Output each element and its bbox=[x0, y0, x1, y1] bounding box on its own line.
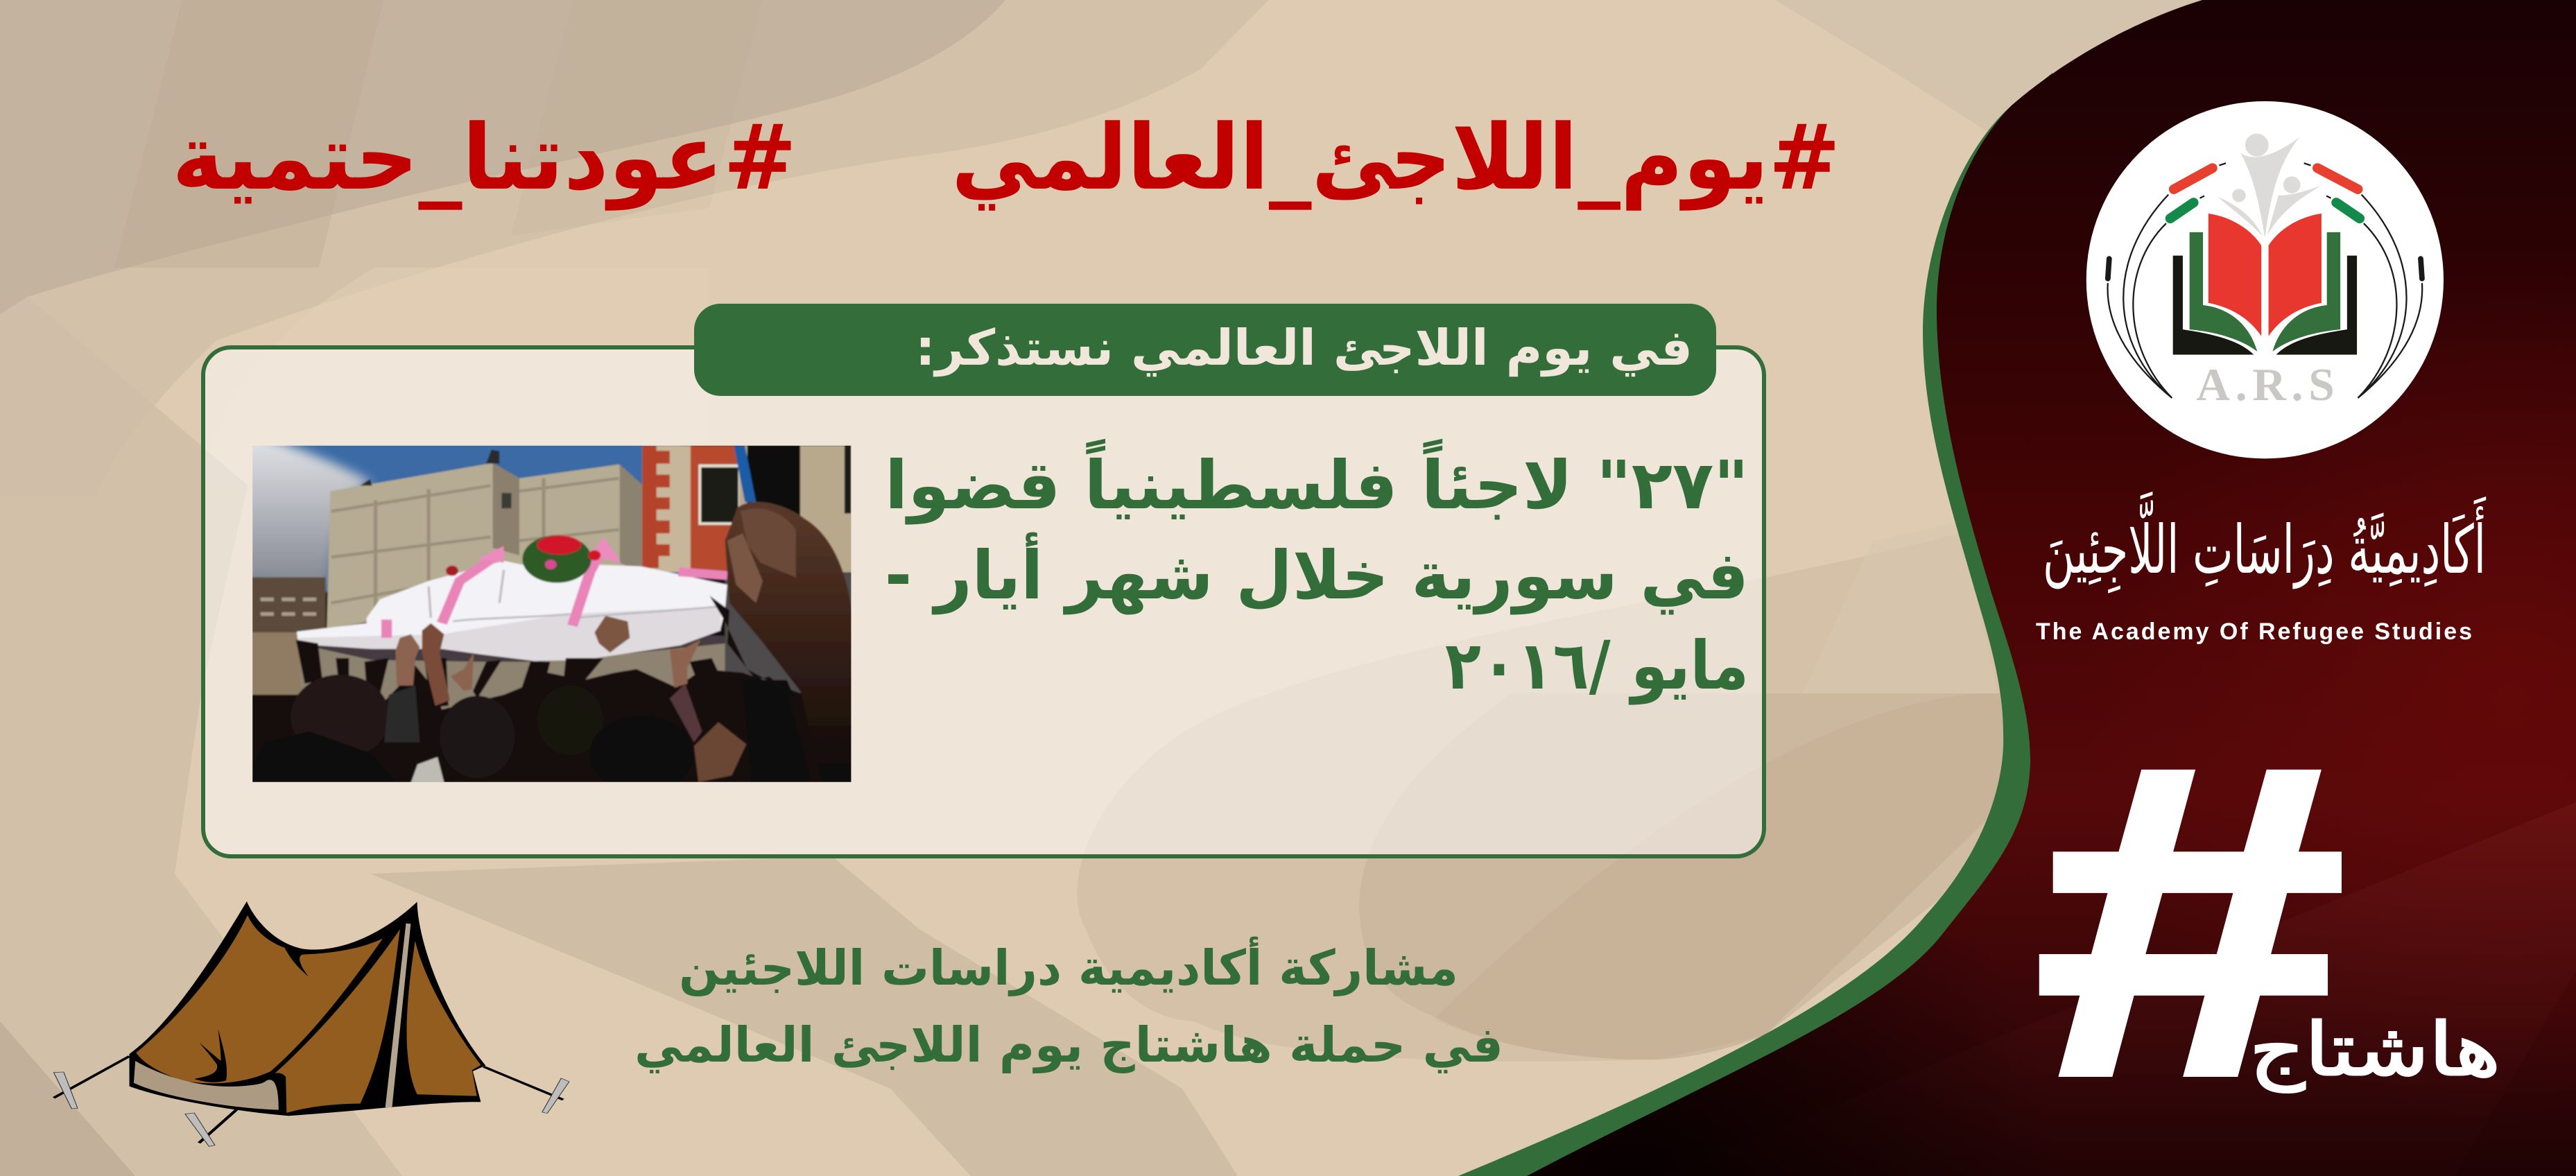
dark maroon side panel with green curve bbox=[1458, 0, 2576, 1176]
main statement text: "٢٧" لاجئاً فلسطينياً قضوا bbox=[885, 438, 1749, 525]
icon: figures bbox=[2218, 134, 2321, 238]
panel title tab bbox=[694, 304, 1716, 396]
photo: funeral procession bbox=[252, 445, 852, 782]
icon: tent bbox=[53, 901, 569, 1146]
logo: academy emblem bbox=[2086, 101, 2444, 458]
panel title tab: في يوم اللاجئ العالمي نستذكر: bbox=[915, 319, 1693, 377]
participation text: مشاركة أكاديمية دراسات اللاجئين bbox=[679, 936, 1458, 996]
participation text: في حملة هاشتاج يوم اللاجئ العالمي bbox=[634, 1017, 1503, 1074]
main statement text: مايو /٢٠١٦ bbox=[1445, 627, 1749, 705]
heading: red hashtag our return is inevitable: #عودتنا_حتمية bbox=[172, 105, 797, 211]
icon: book bbox=[2173, 214, 2357, 355]
logo letters: A.R.S bbox=[2196, 360, 2335, 410]
heading: red hashtag world refugee day: #يوم_اللاجئ_العالمي bbox=[951, 105, 1840, 211]
main panel bbox=[203, 347, 1764, 856]
academy name english: The Academy Of Refugee Studies bbox=[2036, 619, 2472, 645]
main statement text: في سورية خلال شهر أيار - bbox=[885, 533, 1749, 615]
icon: reeds bbox=[2108, 163, 2422, 398]
hashtag word: هاشتاج bbox=[2249, 1008, 2500, 1093]
large hash symbol: # bbox=[2036, 677, 2344, 1165]
main statement text bbox=[885, 438, 1749, 705]
participation text bbox=[634, 936, 1503, 1074]
